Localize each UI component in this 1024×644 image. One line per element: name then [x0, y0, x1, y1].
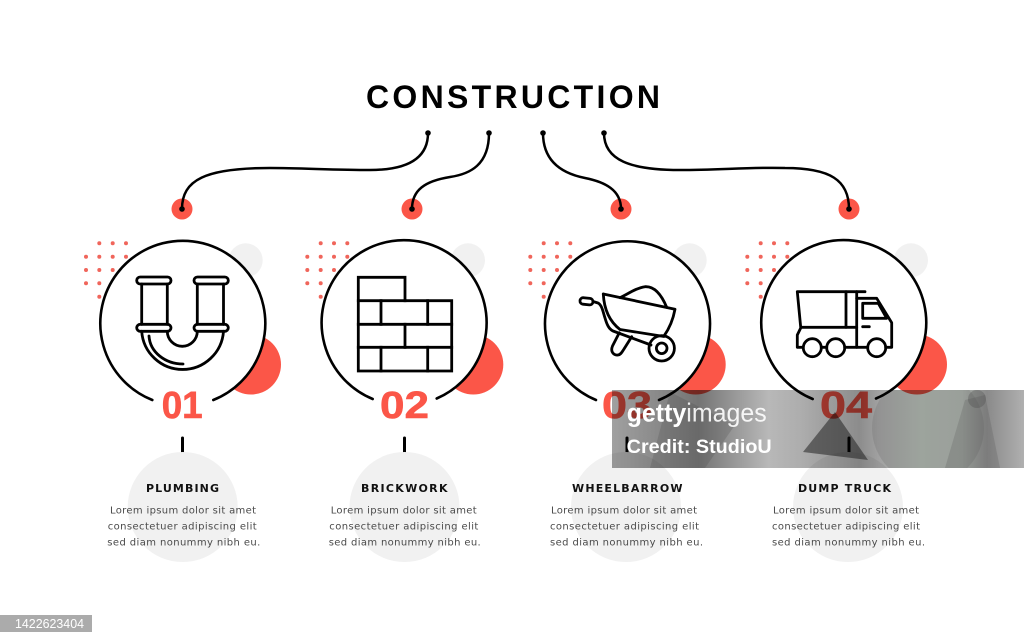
- stem: [626, 438, 628, 464]
- connector: step 4: [601, 130, 860, 220]
- number 01: 01: [162, 385, 203, 427]
- icon: dump truck: [797, 292, 892, 357]
- text block: brickwork: [329, 452, 481, 562]
- text block: wheelbarrow: consectetuer adipiscing elit: [550, 522, 699, 532]
- image id tag: 1422623404: [15, 617, 84, 631]
- text block: wheelbarrow: Lorem ipsum dolor sit amet: [551, 506, 697, 516]
- text block: plumbing: consectetuer adipiscing elit: [108, 522, 257, 532]
- text block: plumbing: Lorem ipsum dolor sit amet: [110, 506, 256, 516]
- icon: wheelbarrow: [580, 287, 675, 361]
- text block: dump truck: sed diam nonummy nibh eu.: [772, 538, 925, 548]
- text block: wheelbarrow: [550, 452, 703, 562]
- stem: [403, 438, 406, 464]
- credit text: Credit: StudioU: [627, 437, 772, 458]
- connector lines from title to the four steps: [172, 130, 860, 220]
- ring: [761, 240, 926, 399]
- text block: dump truck: consectetuer adipiscing elit: [772, 522, 920, 532]
- ring: [322, 240, 487, 399]
- text block: plumbing: PLUMBING: [146, 482, 219, 495]
- decorative dots: [528, 241, 572, 299]
- number 03: 03: [602, 385, 652, 427]
- text block: brickwork: Lorem ipsum dolor sit amet: [331, 506, 477, 516]
- connector: step 2: [402, 130, 492, 220]
- stem: [848, 438, 850, 464]
- stem: [181, 438, 184, 464]
- connector: step 3: [540, 130, 632, 220]
- watermark banner: [612, 390, 1024, 468]
- panel: dump truck: [745, 240, 947, 562]
- decorative dots: [84, 241, 128, 299]
- number 02: 02: [380, 385, 429, 427]
- text block: brickwork: sed diam nonummy nibh eu.: [329, 538, 481, 548]
- text block: plumbing: sed diam nonummy nibh eu.: [107, 538, 260, 548]
- text block: wheelbarrow: WHEELBARROW: [572, 482, 682, 495]
- text block: brickwork: BRICKWORK: [361, 482, 448, 495]
- decorative dots: [745, 241, 789, 299]
- panel: plumbing: [84, 241, 281, 562]
- icon: pipe: [137, 277, 228, 369]
- connector: step 1: [172, 130, 431, 220]
- number 04: 04: [820, 385, 872, 427]
- text block: brickwork: consectetuer adipiscing elit: [329, 522, 478, 532]
- decorative dots: [305, 241, 349, 299]
- text block: dump truck: [772, 452, 925, 562]
- text block: dump truck: DUMP TRUCK: [798, 482, 891, 495]
- text block: dump truck: Lorem ipsum dolor sit amet: [773, 506, 919, 516]
- text block: wheelbarrow: sed diam nonummy nibh eu.: [550, 538, 703, 548]
- panel: wheelbarrow: [528, 241, 726, 562]
- getty logo text: gettyimages: [627, 398, 767, 428]
- title: CONSTRUCTION: [366, 79, 660, 115]
- image id tag: [0, 615, 92, 632]
- text block: plumbing: [107, 452, 260, 562]
- icon: brick wall: [358, 277, 452, 371]
- ring: [545, 241, 710, 400]
- ring: [100, 241, 265, 400]
- panel: brickwork: [305, 240, 503, 562]
